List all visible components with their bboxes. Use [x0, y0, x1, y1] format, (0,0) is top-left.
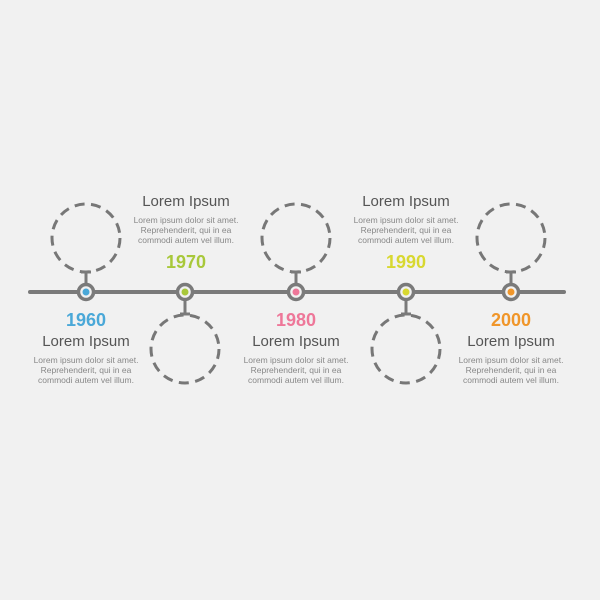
item 1990 — [354, 193, 458, 383]
circle placeholder 1990 — [372, 315, 440, 383]
body 1970: Reprehenderit, qui in ea — [141, 225, 232, 235]
node 1970 — [178, 284, 192, 300]
body 1990: Lorem ipsum dolor sit amet. — [354, 215, 458, 225]
body 1970: Lorem ipsum dolor sit amet. — [134, 215, 238, 225]
body 2000: Reprehenderit, qui in ea — [466, 365, 557, 375]
node 1960 — [78, 284, 94, 300]
node 1980 — [288, 284, 304, 300]
year 1980: 1980 — [276, 310, 316, 330]
item 1980 — [244, 204, 348, 385]
stem 1990 — [401, 300, 411, 314]
body 2000: commodi autem vel illum. — [463, 375, 559, 385]
stem 1960 — [81, 272, 91, 284]
body 1960: commodi autem vel illum. — [38, 375, 134, 385]
year 1970: 1970 — [166, 252, 206, 272]
node 2000 — [504, 284, 518, 300]
stem 2000 — [506, 272, 516, 284]
heading 1990: Lorem Ipsum — [362, 193, 450, 210]
heading 1960: Lorem Ipsum — [42, 333, 130, 350]
body 1990: Reprehenderit, qui in ea — [361, 225, 452, 235]
stem 1970 — [180, 300, 190, 314]
item 2000 — [459, 204, 563, 385]
heading 1970: Lorem Ipsum — [142, 193, 230, 210]
item 1970 — [134, 193, 238, 383]
body 1970: commodi autem vel illum. — [138, 235, 234, 245]
body 1960: Lorem ipsum dolor sit amet. — [34, 355, 138, 365]
body 1980: Lorem ipsum dolor sit amet. — [244, 355, 348, 365]
body 2000: Lorem ipsum dolor sit amet. — [459, 355, 563, 365]
node 1990 — [398, 284, 414, 300]
year 1990: 1990 — [386, 252, 426, 272]
body 1980: commodi autem vel illum. — [248, 375, 344, 385]
body 1960: Reprehenderit, qui in ea — [41, 365, 132, 375]
heading 2000: Lorem Ipsum — [467, 333, 555, 350]
circle placeholder 1980 — [262, 204, 330, 272]
heading 1980: Lorem Ipsum — [252, 333, 340, 350]
year 1960: 1960 — [66, 310, 106, 330]
year 2000: 2000 — [491, 310, 531, 330]
body 1990: commodi autem vel illum. — [358, 235, 454, 245]
circle placeholder 1970 — [151, 315, 219, 383]
timeline line — [30, 290, 564, 294]
body 1980: Reprehenderit, qui in ea — [251, 365, 342, 375]
circle placeholder 2000 — [477, 204, 545, 272]
item 1960 — [34, 204, 138, 385]
stem 1980 — [291, 272, 301, 284]
circle placeholder 1960 — [52, 204, 120, 272]
